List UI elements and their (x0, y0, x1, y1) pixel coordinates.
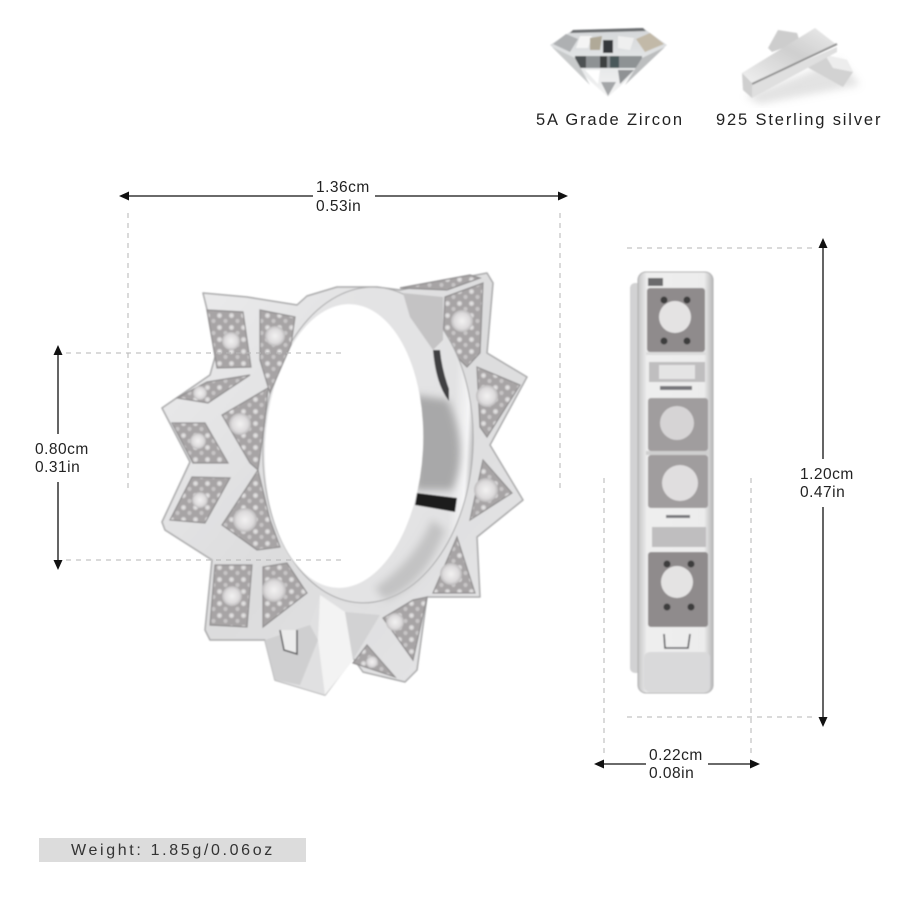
dimension: width 1.36cm: 1.36cm (316, 179, 370, 196)
dimension: height 1.20cm: 1.20cm (800, 466, 854, 483)
lower band shading (375, 520, 445, 600)
third setting (648, 455, 708, 508)
star silhouette (162, 273, 527, 695)
top setting (647, 288, 705, 352)
rough setting top (403, 293, 443, 350)
hole (258, 300, 430, 592)
bottom setting (648, 552, 708, 627)
hinge spike (265, 595, 380, 695)
dimension: width 0.22cm (594, 478, 760, 782)
reflection dark patch (415, 493, 457, 512)
dimension: height 1.20cm (627, 238, 854, 727)
earring: front view (162, 273, 527, 695)
label: 5A Grade Zircon: 5A Grade Zircon (536, 111, 684, 129)
second setting (648, 398, 708, 451)
dimension: width 0.22cm: 0.08in (649, 765, 694, 782)
large stones (190, 310, 498, 668)
dimension: width 0.22cm: 0.22cm (649, 747, 703, 764)
dimension: height 0.80cm: 0.80cm (35, 441, 89, 458)
dimension: height 0.80cm (35, 345, 342, 570)
hinge slot shadow (433, 350, 449, 401)
label: 925 Sterling silver: 925 Sterling silver (716, 111, 882, 129)
weight label (39, 838, 306, 862)
dimension: height 1.20cm: 0.47in (800, 484, 845, 501)
dimension: height 0.80cm: 0.31in (35, 459, 80, 476)
weight label: Weight: 1.85g/0.06oz (71, 842, 275, 859)
dimension: width 1.36cm: 0.53in (316, 198, 361, 215)
band (255, 282, 481, 608)
hinge loop (280, 630, 297, 654)
front pave panels (170, 310, 307, 627)
back spikes pave panels (353, 275, 520, 677)
inner band shading (415, 395, 460, 490)
icon: silver bars (742, 28, 860, 104)
icon: zircon diamond (550, 28, 667, 97)
dimension: width 1.36cm (119, 179, 568, 490)
earring: side view (630, 272, 713, 693)
